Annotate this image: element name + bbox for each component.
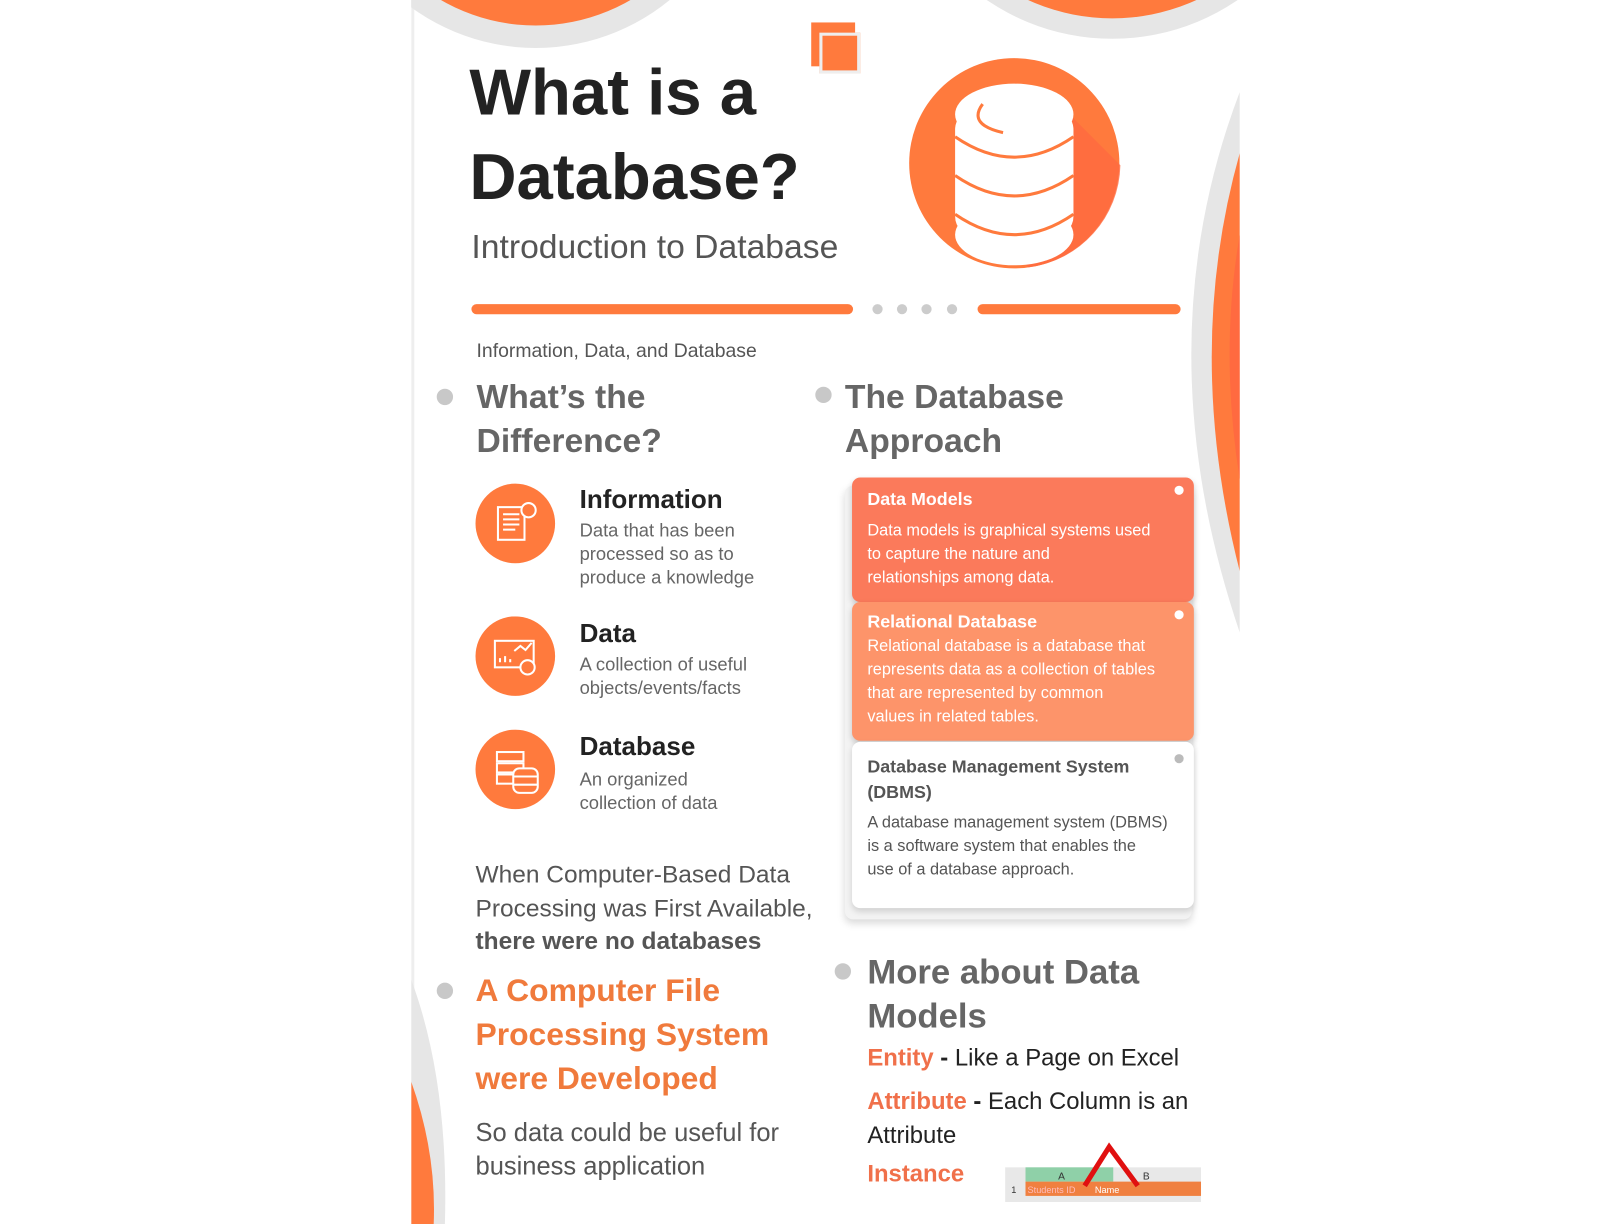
heading: difference [436, 378, 662, 459]
excel snippet: B [1143, 1172, 1150, 1183]
subtitle: Introduction to Database [471, 228, 838, 265]
card stack shadow [845, 486, 1192, 919]
heading: database approach: The Database [845, 378, 1064, 415]
card: DBMS: A database management system (DBMS) [867, 814, 1168, 832]
divider [471, 304, 1181, 314]
item: database: Database [580, 733, 695, 761]
icon: document [476, 484, 556, 564]
card: data models: to capture the nature and [867, 546, 1050, 563]
card: DBMS: Database Management System [867, 756, 1129, 777]
text: business: business application [476, 1152, 705, 1181]
card: data models [852, 478, 1194, 602]
card: data models: Data models is graphical systems used [867, 522, 1150, 540]
text: entity: Entity - Like a Page on Excel [867, 1044, 1179, 1070]
item: information: processed so as to [580, 544, 734, 564]
item: information: Data that has been [580, 520, 735, 541]
text: history [476, 861, 813, 955]
text: attribute [867, 1088, 1188, 1148]
item: database: An organized [580, 769, 688, 790]
title [469, 55, 800, 213]
heading: difference: Difference? [477, 421, 662, 459]
card: DBMS: (DBMS) [867, 782, 932, 802]
item: information: Information [580, 486, 723, 514]
heading: file processing: were Developed [476, 1060, 718, 1096]
excel snippet: A [1058, 1172, 1065, 1183]
title: Database? [469, 140, 800, 213]
item: database: collection of data [580, 793, 717, 813]
icon: database cylinder [909, 58, 1120, 268]
text: history: Processing was First Available, [476, 894, 813, 922]
icon: chart [476, 616, 556, 696]
card: relational database: Relational database is a database that [867, 638, 1145, 655]
icon: server [476, 730, 556, 810]
card: DBMS [852, 742, 1194, 908]
heading: difference: What’s the [477, 378, 646, 415]
card: relational database: that are represented by common [867, 685, 1103, 702]
text: history: When Computer-Based Data [476, 861, 790, 889]
excel snippet: Name [1095, 1185, 1119, 1195]
heading: more about data models [834, 953, 1140, 1036]
card: DBMS: use of a database approach. [867, 861, 1074, 879]
heading: file processing: Processing System [476, 1016, 769, 1052]
item: data: A collection of useful [580, 654, 747, 674]
heading: more about data models: More about Data [867, 953, 1139, 992]
excel snippet: 1 [1011, 1185, 1016, 1195]
background decorations [411, 0, 1240, 1224]
icon: decorative squares [811, 22, 860, 74]
card: relational database [852, 602, 1194, 741]
title: What is a [469, 55, 756, 129]
card: relational database: represents data as a collection of tables [867, 661, 1155, 679]
card: relational database: Relational Database [867, 611, 1037, 632]
text: history: there were no databases [476, 928, 761, 955]
heading: more about data models: Models [867, 997, 987, 1036]
card: data models: Data Models [867, 489, 973, 509]
item: data [476, 616, 747, 698]
card: relational database: values in related tables. [867, 708, 1039, 726]
item: information: produce a knowledge [580, 567, 754, 588]
item: information [476, 484, 754, 588]
card: data models: relationships among data. [867, 569, 1054, 587]
heading: file processing: A Computer File [476, 972, 720, 1008]
item: data: objects/events/facts [580, 678, 741, 698]
text: attribute: Attribute - Each Column is an [867, 1088, 1188, 1114]
heading: database approach: Approach [845, 421, 1002, 459]
text: attribute: Attribute [867, 1121, 956, 1148]
text: business [476, 1118, 779, 1181]
card: DBMS: is a software system that enables the [867, 838, 1136, 855]
excel snippet [1005, 1142, 1201, 1202]
section label: Information, Data, and Database [477, 341, 757, 362]
item: database [476, 730, 718, 813]
heading: database approach [815, 378, 1064, 459]
heading: file processing [436, 972, 769, 1096]
item: data: Data [580, 619, 636, 648]
excel snippet: Students ID [1028, 1185, 1076, 1195]
text: instance: Instance [867, 1160, 964, 1187]
text: business: So data could be useful for [476, 1118, 779, 1147]
